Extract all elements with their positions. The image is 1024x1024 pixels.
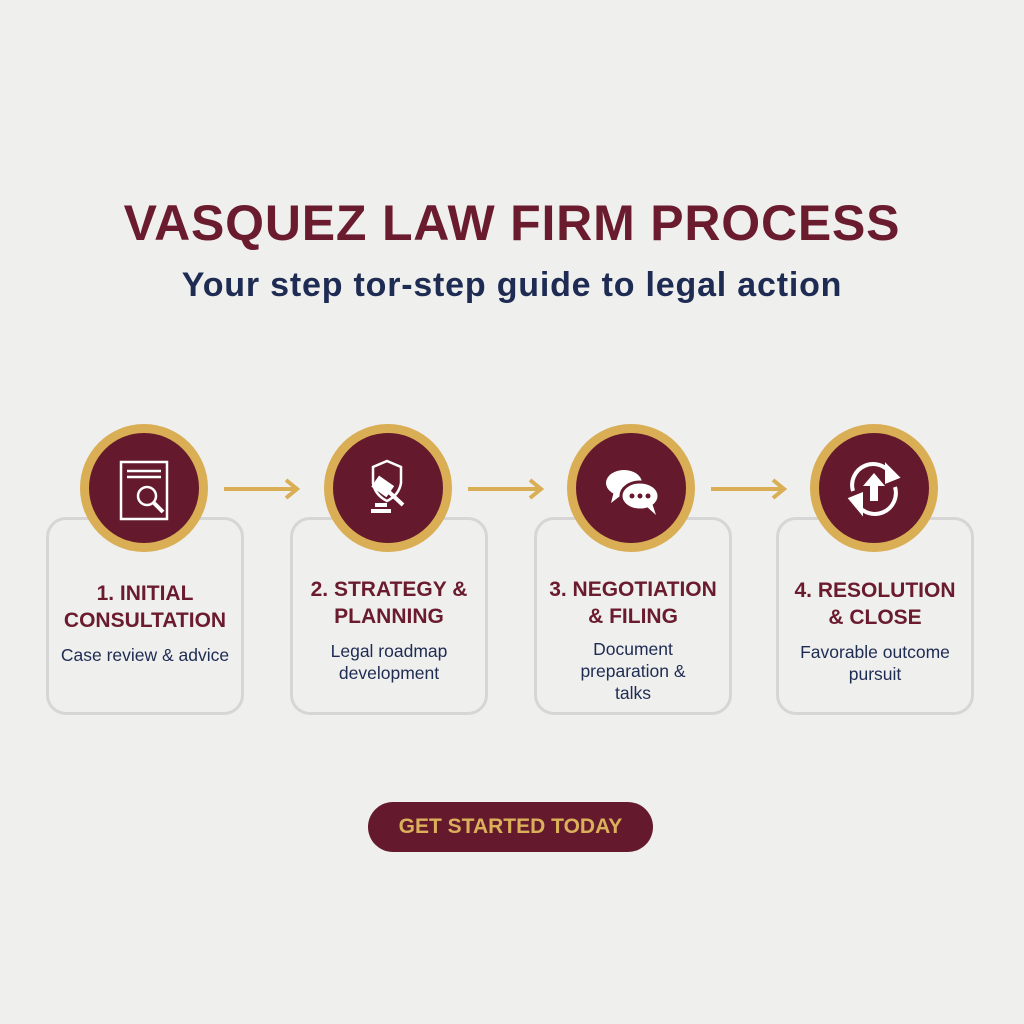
card 4 — [776, 517, 974, 715]
card 4: pursuit — [849, 664, 901, 684]
card 4: & CLOSE — [828, 606, 922, 629]
card 1: CONSULTATION — [64, 609, 226, 632]
icon: chat bubbles — [567, 424, 695, 552]
card 4: Favorable outcome — [800, 642, 950, 662]
arrow 1 — [224, 478, 300, 500]
card 1: 1. INITIAL — [97, 582, 193, 605]
button: get started: GET STARTED TODAY — [399, 815, 622, 838]
icon: document search — [80, 424, 208, 552]
button: get started — [368, 802, 653, 852]
card 1 — [46, 517, 244, 715]
card 4: 4. RESOLUTION — [794, 579, 956, 602]
card 2: Legal roadmap — [331, 641, 447, 661]
card 2: PLANNING — [334, 605, 444, 628]
card 1: Case review & advice — [61, 645, 229, 665]
title: VASQUEZ LAW FIRM PROCESS — [124, 195, 900, 251]
card 2: 2. STRATEGY & — [311, 578, 467, 601]
card 2: development — [339, 663, 439, 683]
card 3: Document — [593, 639, 673, 659]
card 3: & FILING — [588, 605, 678, 628]
icon: shield gavel — [324, 424, 452, 552]
card 3 — [534, 517, 732, 715]
icon: refresh arrow up — [810, 424, 938, 552]
card 3: 3. NEGOTIATION — [549, 578, 717, 601]
card 3: talks — [615, 683, 651, 703]
subtitle: Your step tor-step guide to legal action — [182, 266, 842, 304]
arrow 2 — [468, 478, 544, 500]
arrow 3 — [711, 478, 787, 500]
card 3: preparation & — [580, 661, 686, 681]
card 2 — [290, 517, 488, 715]
